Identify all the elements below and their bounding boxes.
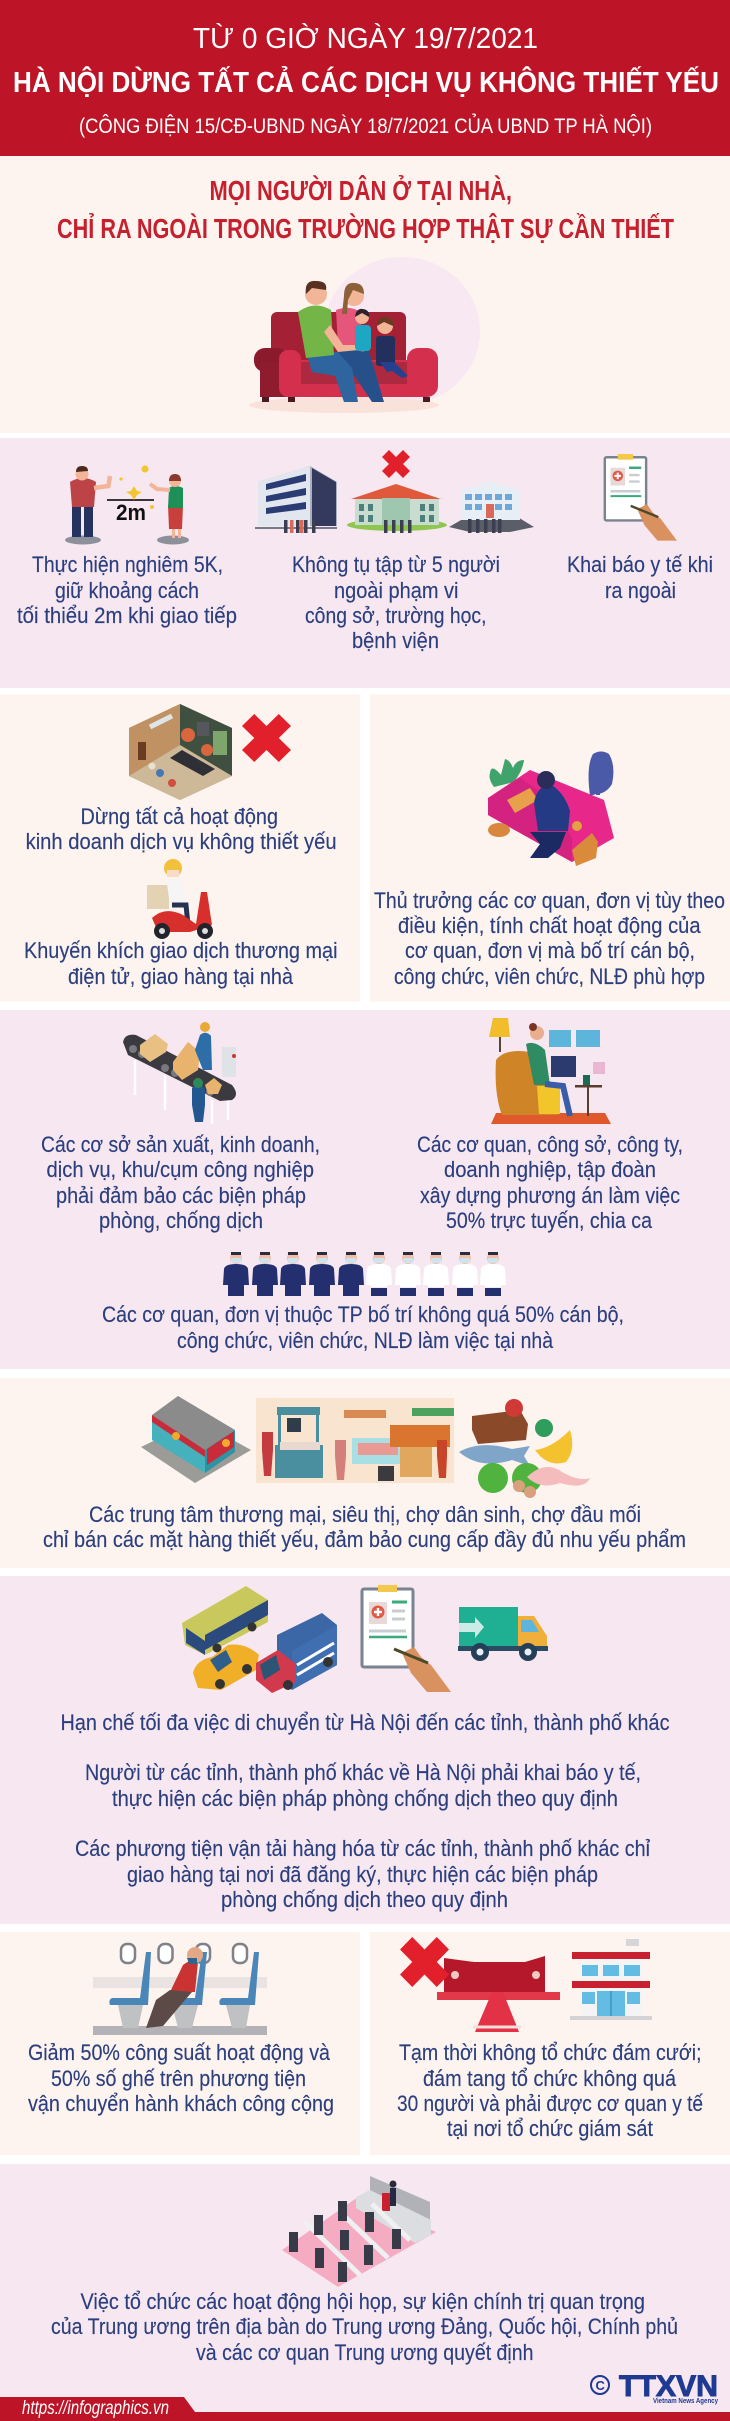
- panel: agency heads arrange staff: [370, 694, 730, 1002]
- text: markets: Các trung tâm thương mại, siêu thị, chợ dân sinh, chợ đầu mối: [89, 1502, 641, 1527]
- text: 5K: tối thiểu 2m khi giao tiếp: [17, 603, 237, 628]
- text: medical declaration: Khai báo y tế khi: [567, 552, 713, 577]
- text: arrivals must declare: thực hiện các biện pháp phòng chống dịch theo quy định: [112, 1786, 618, 1811]
- text: production facilities: phòng, chống dịch: [99, 1208, 263, 1233]
- icon: red cross: [242, 714, 291, 762]
- icon: wedding stage: [437, 1956, 560, 2032]
- text: weddings funerals: [397, 2040, 703, 2141]
- heading: stay at home: MỌI NGƯỜI DÂN Ở TẠI NHÀ,: [210, 174, 512, 206]
- panel: public transport: [0, 1932, 360, 2155]
- panel: red header: [0, 0, 730, 156]
- icon: medical declaration clipboard: [605, 454, 677, 541]
- icon: office, school and hospital with crowds: [255, 450, 534, 533]
- text: stop services: [26, 804, 337, 854]
- text: no gatherings: công sở, trường học,: [305, 603, 486, 628]
- text: no gatherings: [292, 552, 500, 653]
- logo: TTXVN: TTXVN: [619, 2370, 718, 2403]
- icon: blue and red truck: [256, 1613, 337, 1693]
- text: weddings funerals: tại nơi tổ chức giám sát: [447, 2116, 653, 2141]
- text: offices working plan: [417, 1132, 683, 1233]
- text: 5K: Thực hiện nghiêm 5K,: [32, 552, 223, 577]
- panel: 5K rules: [0, 438, 730, 688]
- panel: production and remote work: [0, 1010, 730, 1369]
- panel: central political events: [0, 2164, 730, 2421]
- text: production facilities: phải đảm bảo các biện pháp: [56, 1183, 306, 1208]
- icon: isometric supermarket: [141, 1396, 251, 1483]
- footer: red bar with URL: https://infographics.vn: [22, 2398, 169, 2419]
- text: weddings funerals: đám tang tổ chức không quá: [423, 2066, 677, 2091]
- icon: two people 2m apart: [65, 466, 189, 544]
- heading: stay at home: [57, 174, 674, 244]
- text: medical declaration: ra ngoài: [605, 578, 676, 603]
- icon: two people 2m apart: 2m: [116, 500, 146, 525]
- icon: food group: [459, 1399, 590, 1498]
- icon: man working on pink sofa: [488, 752, 614, 866]
- text: offices working plan: Các cơ quan, công sở, công ty,: [417, 1132, 683, 1157]
- text: 5K: giữ khoảng cách: [55, 578, 199, 603]
- text: central events: Việc tổ chức các hoạt động hội họp, sự kiện chính trị quan trọng: [80, 2289, 645, 2314]
- text: production facilities: dịch vụ, khu/cụm công nghiệp: [46, 1157, 314, 1182]
- text: central events: và các cơ quan Trung ương quyết định: [196, 2340, 534, 2365]
- text: arrivals must declare: [85, 1760, 641, 1811]
- icon: conveyor belt with workers: [123, 1022, 236, 1124]
- icon: food market: [256, 1398, 454, 1483]
- text: stop services: Dừng tất cả hoạt động: [80, 804, 278, 829]
- panel: travel restrictions: [0, 1576, 730, 1924]
- text: 50 percent staff: [102, 1302, 624, 1353]
- icon: taxi: [193, 1644, 259, 1690]
- text: production facilities: Các cơ sở sản xuất, kinh doanh,: [41, 1132, 320, 1157]
- text: weddings funerals: Tạm thời không tổ chức đám cưới;: [399, 2040, 702, 2065]
- text: reduce capacity: Giảm 50% công suất hoạt động và: [28, 2040, 331, 2065]
- text: 50 percent staff: Các cơ quan, đơn vị thuộc TP bố trí không quá 50% cán bộ,: [102, 1302, 624, 1327]
- text: offices working plan: doanh nghiệp, tập đoàn: [444, 1157, 656, 1182]
- text: medical declaration: [567, 552, 713, 603]
- text: central events: [51, 2289, 678, 2365]
- text: freight vehicles: phòng chống dịch theo quy định: [221, 1887, 508, 1912]
- icon: family on red sofa: [249, 257, 480, 413]
- text: freight vehicles: [75, 1836, 650, 1912]
- logo: TTXVN: C: [596, 2378, 606, 2393]
- footer: red bar with URL: [0, 2397, 730, 2421]
- text: markets: [43, 1502, 686, 1552]
- icon: isometric cafe: [129, 704, 232, 800]
- text: offices working plan: 50% trực tuyến, chia ca: [446, 1208, 653, 1233]
- icon: conference hall: [282, 2176, 436, 2287]
- icon: medical declaration clipboard: [362, 1585, 451, 1692]
- text: agency heads: điều kiện, tính chất hoạt động của: [398, 913, 701, 938]
- text: reduce capacity: [28, 2040, 334, 2116]
- text: freight vehicles: giao hàng tại nơi đã đăng ký, thực hiện các biện pháp: [127, 1862, 598, 1887]
- text: e-commerce: Khuyến khích giao dịch thương mại: [24, 938, 338, 963]
- text: no gatherings: ngoài phạm vi: [334, 578, 458, 603]
- text: production facilities: [41, 1132, 320, 1233]
- text: reduce capacity: 50% số ghế trên phương tiện: [51, 2066, 306, 2091]
- text: agency heads: cơ quan, đơn vị mà bố trí cán bộ,: [405, 938, 695, 963]
- source line: (CÔNG ĐIỆN 15/CĐ-UBND NGÀY 18/7/2021 CỦA UBND TP HÀ NỘI): [79, 114, 652, 138]
- text: e-commerce: [24, 938, 338, 989]
- text: e-commerce: điện tử, giao hàng tại nhà: [68, 964, 294, 989]
- icon: ten staff, five navy and five white: [223, 1252, 506, 1296]
- icon: green delivery truck: [458, 1607, 548, 1661]
- icon: funeral building: [570, 1939, 652, 2020]
- icon: red cross: [400, 1937, 449, 1987]
- text: no gatherings: bệnh viện: [352, 628, 439, 653]
- panel: markets: [0, 1378, 730, 1568]
- panel: weddings and funerals: [370, 1932, 730, 2155]
- text: arrivals must declare: Người từ các tỉnh, thành phố khác về Hà Nội phải khai báo y tế,: [85, 1760, 641, 1785]
- panel: stay at home: [0, 156, 730, 433]
- text: stop services: kinh doanh dịch vụ không thiết yếu: [26, 829, 337, 854]
- panel: non-essential services stop: [0, 694, 360, 1002]
- text: reduce capacity: vận chuyển hành khách công cộng: [28, 2091, 334, 2116]
- text: limit movement: Hạn chế tối đa việc di chuyển từ Hà Nội đến các tỉnh, thành phố khác: [60, 1710, 670, 1735]
- text: agency heads: [374, 888, 725, 989]
- text: offices working plan: xây dựng phương án làm việc: [420, 1183, 680, 1208]
- text: freight vehicles: Các phương tiện vận tải hàng hóa từ các tỉnh, thành phố khác chỉ: [75, 1836, 650, 1861]
- text: no gatherings: Không tụ tập từ 5 người: [292, 552, 500, 577]
- icon: woman working from home: [489, 1018, 611, 1124]
- icon: aircraft seats with passenger: [93, 1944, 267, 2035]
- text: 5K: [17, 552, 237, 628]
- header date line: TỪ 0 GIỜ NGÀY 19/7/2021: [193, 22, 538, 55]
- icon: bus: [182, 1586, 268, 1655]
- icon: delivery scooter: [147, 859, 213, 939]
- text: 50 percent staff: công chức, viên chức, NLĐ làm việc tại nhà: [177, 1328, 554, 1353]
